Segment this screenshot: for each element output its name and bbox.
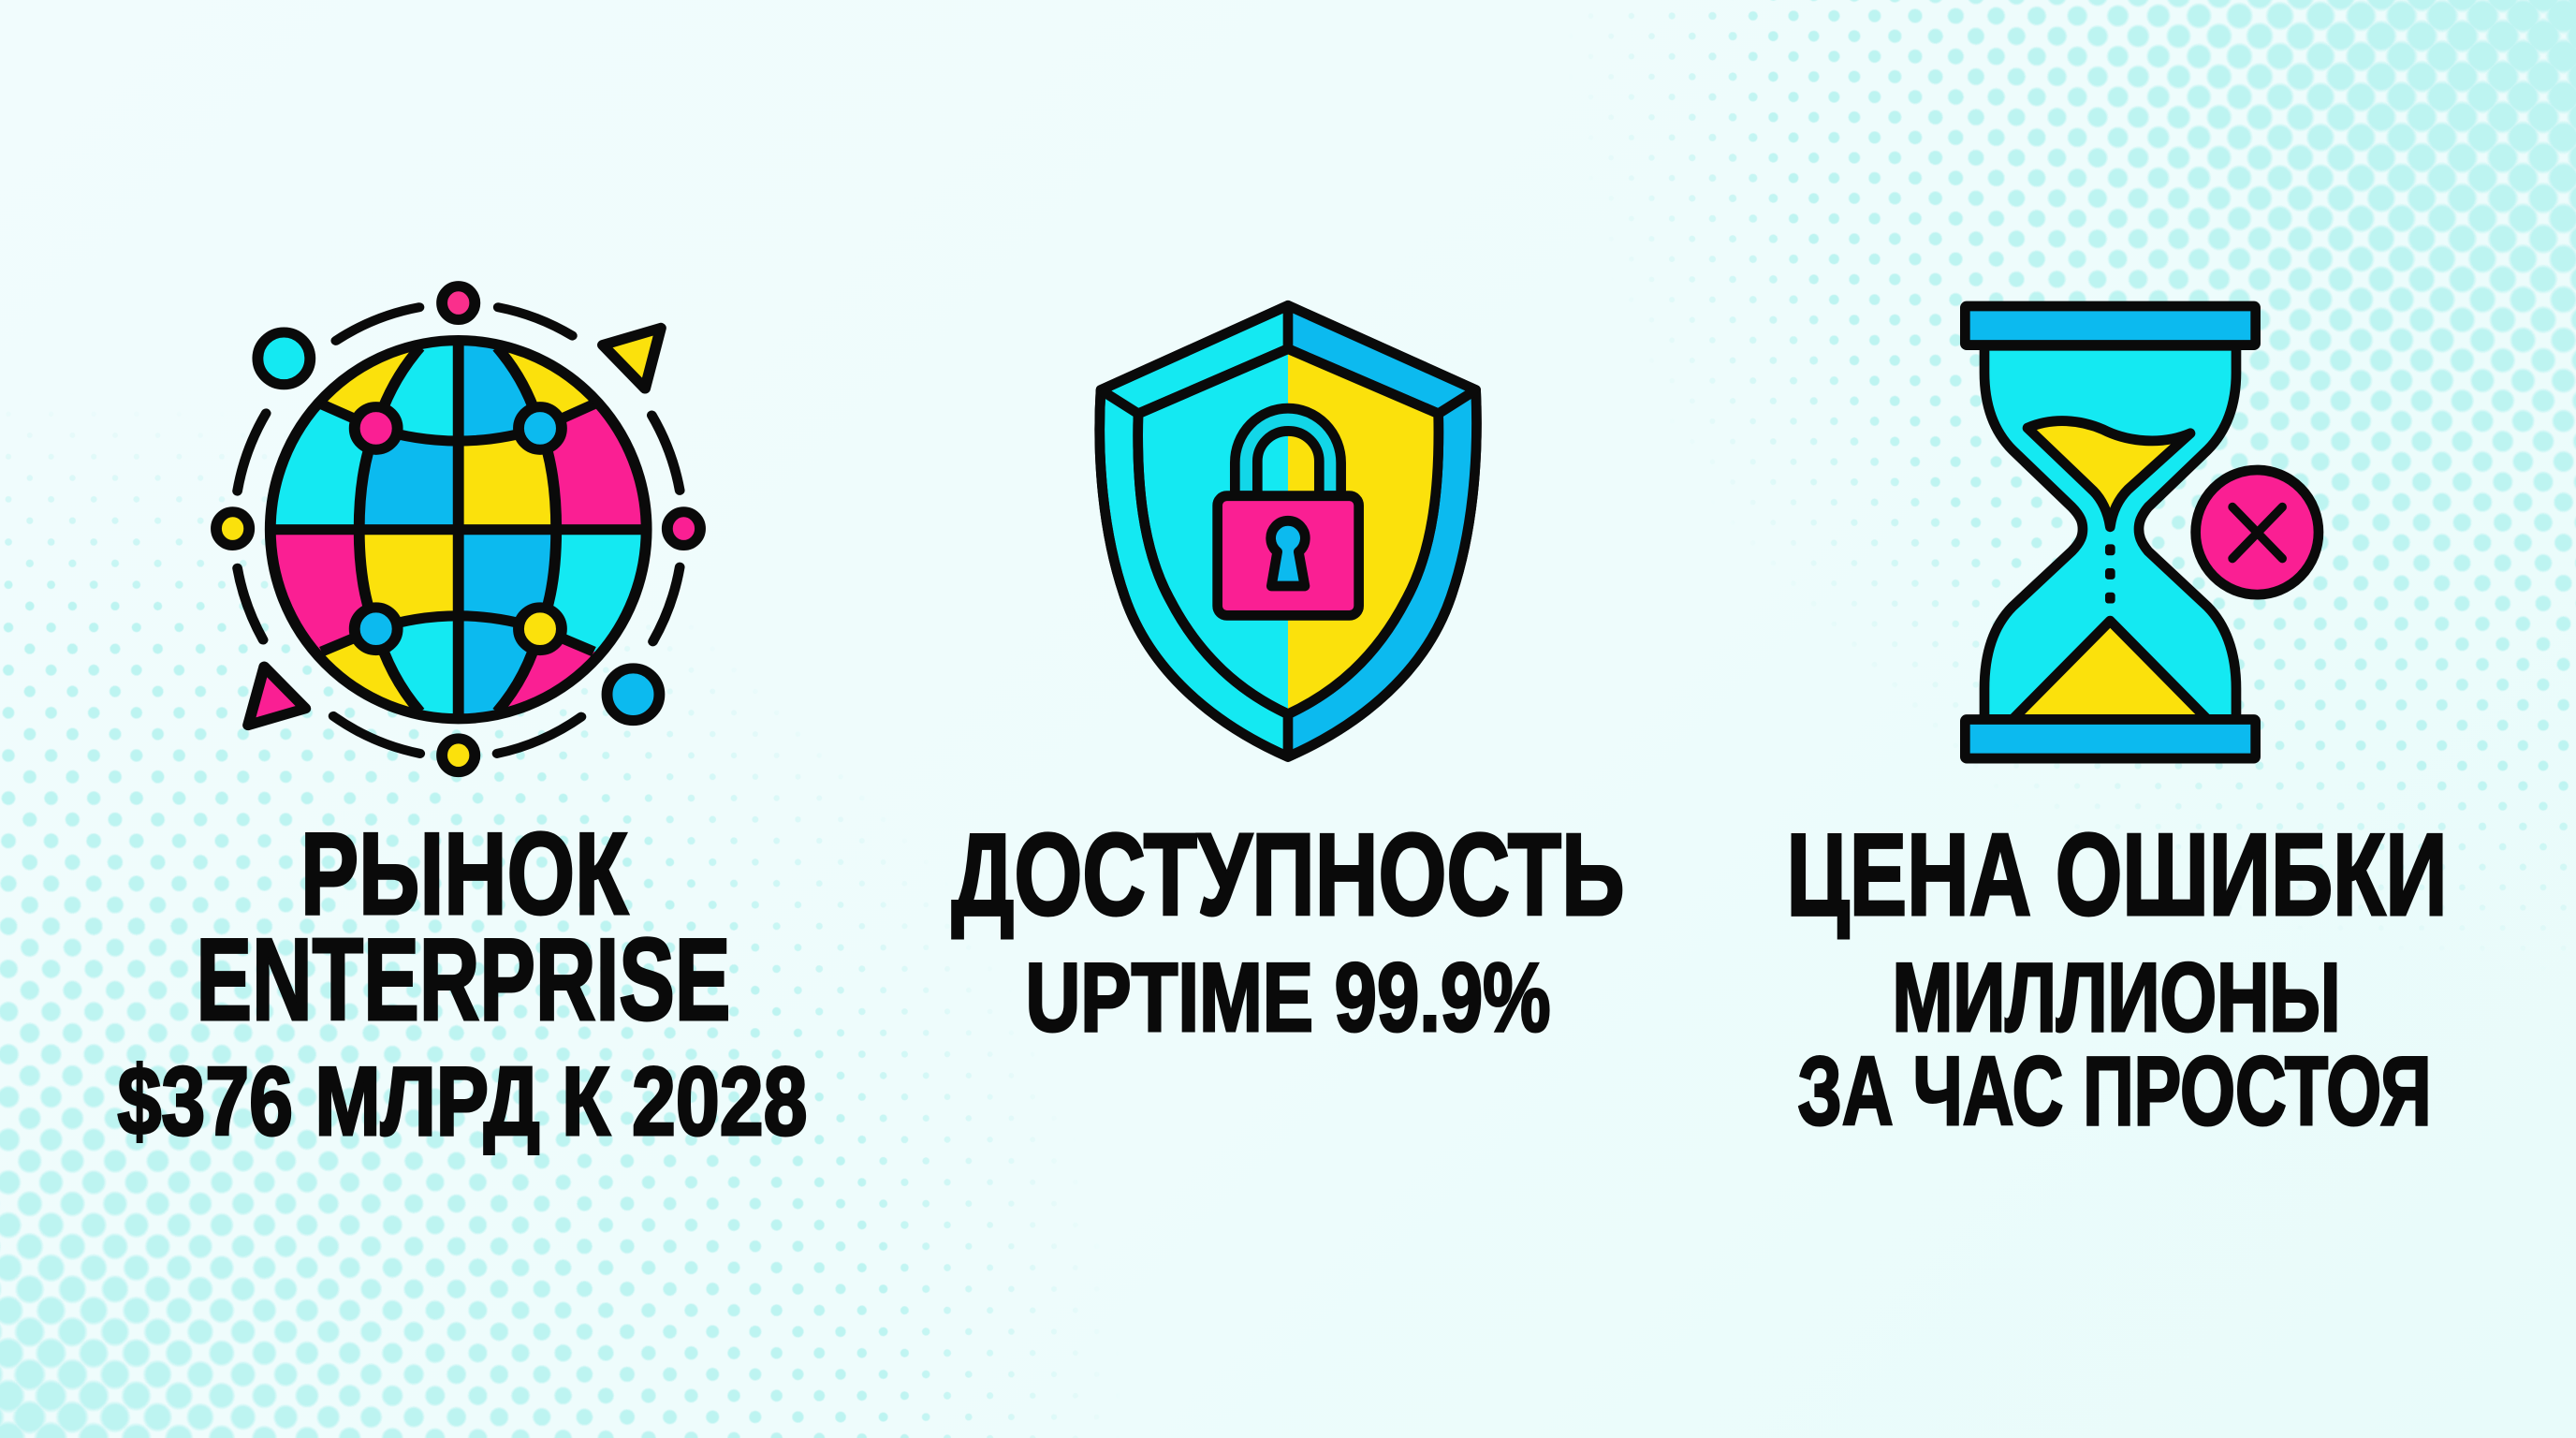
hourglass glass <box>1984 345 2236 720</box>
padlock <box>1218 408 1359 615</box>
shield body <box>1100 305 1476 756</box>
infographic canvas <box>117 281 2443 1155</box>
top cap <box>1965 306 2256 345</box>
globe nodes <box>355 407 562 651</box>
orbit dashes <box>238 307 680 754</box>
panel: cost of failure <box>1787 306 2447 1145</box>
orbit satellites <box>216 286 700 772</box>
panel: market <box>118 286 808 1155</box>
error badge <box>2196 470 2319 594</box>
icon: globe network <box>216 286 700 772</box>
globe grid lines <box>271 341 647 719</box>
bottom cap <box>1965 720 2256 758</box>
lower sand <box>2012 621 2207 720</box>
icon: shield with padlock <box>1100 305 1476 756</box>
upper sand <box>2027 421 2190 527</box>
falling grains <box>2105 544 2115 604</box>
globe cells <box>275 345 641 713</box>
panel: availability <box>952 305 1625 1051</box>
infographic canvas: РЫНОК <box>300 809 629 938</box>
icon: hourglass with error badge <box>1965 306 2319 758</box>
